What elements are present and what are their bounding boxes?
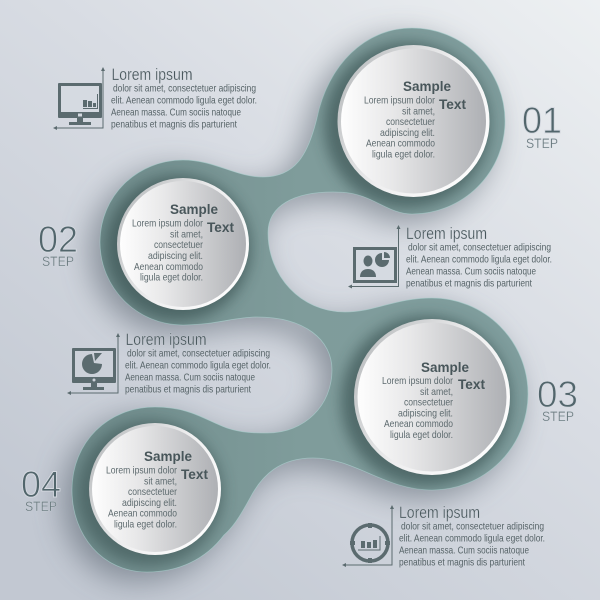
step 04 label: 04 [21,464,61,505]
step 03 label: 03 [537,374,578,415]
text block 3: elit. Aenean commodo ligula eget dolor. [125,360,271,372]
circle 2 body text: adipiscing elit. [148,251,203,262]
circle 1 heading: Sample [403,78,451,94]
axis arrows 1 [53,67,105,130]
circle 3 heading: Text [458,376,485,392]
circle 4 body text: adipiscing elit. [122,498,177,509]
text block 1: penatibus et magnis dis parturient [111,120,237,130]
circle 1 body text: consectetuer [386,117,435,128]
circle 4 body text [106,466,177,530]
text block 1: Aenean massa. Cum sociis natoque [111,108,241,118]
text block 2 [406,224,552,290]
axis arrows 4 [342,505,394,567]
circle 4 body text: consectetuer [128,487,177,498]
text block 1: dolor sit amet, consectetuer adipiscing [113,84,256,94]
text block 1: elit. Aenean commodo ligula eget dolor. [111,96,257,106]
circle 4 body text: sit amet, [144,476,177,488]
shadow of connected shape [62,37,518,581]
icon: presenter with pie chart [354,248,396,282]
circle 2 body text: ligula eget dolor. [140,272,203,284]
text block 2: elit. Aenean commodo ligula eget dolor. [406,254,552,266]
circle 1 body text: ligula eget dolor. [372,150,435,160]
text block 2: dolor sit amet, consectetuer adipiscing [408,242,551,254]
circle 3 body text: sit amet, [420,387,453,398]
text block 1: Lorem ipsum [112,65,192,84]
circle 4 body text: Lorem ipsum dolor [106,466,177,476]
circle 2 body text: sit amet, [170,230,203,240]
circle 2 heading: Text [207,219,234,235]
text block 3: Aenean massa. Cum sociis natoque [125,372,255,384]
icon: monitor with bar chart [58,83,102,125]
text block 3: Lorem ipsum [126,330,206,349]
step 01 label: 01 [522,100,562,141]
circle 2 body text [132,218,203,284]
circle 2 body text: consectetuer [154,240,203,251]
circle 3 body text: adipiscing elit. [398,408,453,420]
circle 4 heading: Sample [144,448,192,464]
step 03 label: STEP [542,408,574,424]
text block 4: elit. Aenean commodo ligula eget dolor. [399,534,545,544]
circle 3 body text: ligula eget dolor. [390,430,453,441]
circle 3 body text: consectetuer [404,398,453,408]
circle 4 [89,423,221,555]
text block 1 [111,65,257,130]
text block 4 [399,503,545,568]
info block 1 [53,65,257,130]
text block 3 [125,330,271,396]
circle 1 heading [403,78,466,112]
circle 1 heading: Text [439,96,466,112]
text block 2: penatibus et magnis dis parturient [406,278,532,290]
info block 2 [348,224,552,290]
step 02 label: STEP [42,253,74,269]
circle 3 heading: Sample [421,359,469,375]
circle 3 [354,319,510,475]
circle 2 body text: Lorem ipsum dolor [132,218,203,230]
step 01 label: STEP [526,135,558,151]
circle 4 body text: ligula eget dolor. [114,520,177,530]
circle 3 heading [421,359,485,392]
text block 4: Aenean massa. Cum sociis natoque [399,546,529,556]
circle 3 body text: Aenean commodo [384,419,453,430]
circle 1 body text: adipiscing elit. [380,128,435,139]
connected teal shape [72,28,528,572]
circle 2 heading: Sample [170,201,218,217]
axis arrows 2 [348,225,400,288]
circle 2 body text: Aenean commodo [134,262,203,273]
circle 2 heading [170,201,234,235]
step 02 label: 02 [38,219,78,260]
info block 4 [342,503,545,568]
circle 1 body text: sit amet, [402,106,435,118]
icon: target with bar chart [350,523,390,563]
circle 1 [338,45,490,197]
axis arrows 3 [67,333,120,395]
info block 3 [67,330,271,396]
circle 1 body text: Aenean commodo [366,138,435,150]
circle 1 body text [364,96,435,160]
text block 4: penatibus et magnis dis parturient [399,558,525,568]
icon: monitor with pie chart [72,348,116,390]
circle 4 heading: Text [181,466,208,482]
text block 4: Lorem ipsum [399,503,480,522]
text block 4: dolor sit amet, consectetuer adipiscing [401,522,544,532]
circle 3 body text: Lorem ipsum dolor [382,376,453,387]
circle 1 body text: Lorem ipsum dolor [364,96,435,106]
text block 3: penatibus et magnis dis parturient [125,384,251,396]
circle 4 body text: Aenean commodo [108,508,177,520]
step 04 label: STEP [25,498,57,514]
text block 3: dolor sit amet, consectetuer adipiscing [127,348,270,360]
text block 2: Lorem ipsum [406,224,487,243]
circle 2 [117,178,249,310]
text block 2: Aenean massa. Cum sociis natoque [406,266,536,278]
circle 3 body text [382,376,453,441]
circle 4 heading [144,448,208,482]
